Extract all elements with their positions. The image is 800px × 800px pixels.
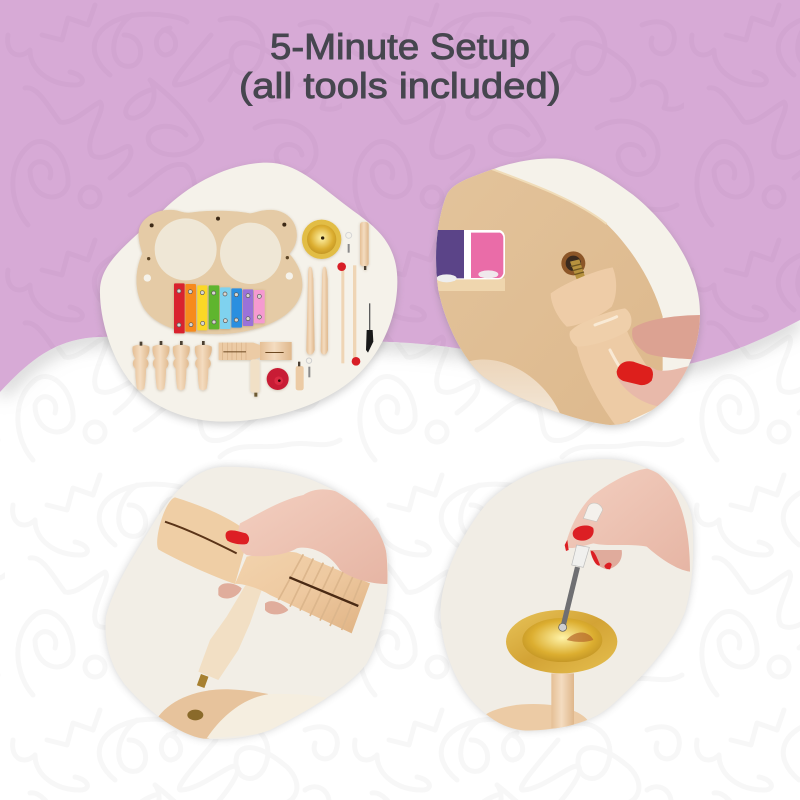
cymbal [506, 610, 617, 673]
red nails [565, 526, 612, 569]
photo contents [440, 460, 693, 730]
brass insert [187, 710, 203, 720]
red nail [617, 361, 653, 385]
panel shadow [436, 161, 700, 428]
panel: attaching guiro [90, 460, 400, 750]
panel blob [100, 163, 397, 422]
panel: screwing leg into board [433, 158, 703, 431]
board wood edge [157, 689, 268, 740]
cymbal [302, 220, 341, 259]
screwdriver handle [572, 503, 603, 567]
drum skin [206, 694, 268, 738]
photo contents [436, 158, 700, 425]
panel shadow [105, 467, 388, 739]
screw hole [561, 251, 585, 279]
red bell [267, 368, 289, 390]
lower fingers [218, 583, 288, 614]
screwdriver shaft [559, 567, 580, 631]
wooden leg [551, 267, 660, 427]
wooden base [486, 704, 588, 730]
lower fingers [590, 550, 622, 569]
panel: all parts laid out [100, 163, 397, 425]
title [239, 26, 561, 106]
title: 5-Minute Setup [270, 26, 530, 67]
hand [238, 489, 388, 584]
faded drum circle [470, 360, 560, 413]
bear shaped wooden board [136, 210, 302, 334]
ribbed body [235, 552, 370, 633]
screwdriver [366, 303, 373, 353]
drumsticks [306, 267, 328, 355]
photo contents [106, 467, 388, 739]
washer and screw [346, 232, 352, 253]
handle peg [198, 582, 262, 680]
short peg and screw [296, 358, 312, 390]
white wave background with squiggle pattern [0, 320, 800, 800]
wood board back [436, 170, 663, 425]
rainbow xylophone bars [174, 283, 265, 333]
peg [360, 222, 369, 270]
title: (all tools included) [239, 65, 561, 106]
panel shadow [441, 459, 693, 731]
wooden stem [551, 673, 574, 728]
hand [565, 468, 690, 572]
slotted tube [157, 497, 249, 584]
red nail [226, 530, 249, 544]
panel: screwing cymbal [437, 456, 697, 734]
thumb [616, 364, 688, 406]
ribs [278, 554, 362, 630]
wooden legs [132, 341, 212, 390]
slot [289, 577, 358, 606]
mallets [337, 262, 360, 366]
xylophone window [433, 230, 505, 291]
guiro instrument [219, 342, 292, 397]
upper finger [632, 315, 702, 360]
panel shadow [100, 166, 397, 425]
